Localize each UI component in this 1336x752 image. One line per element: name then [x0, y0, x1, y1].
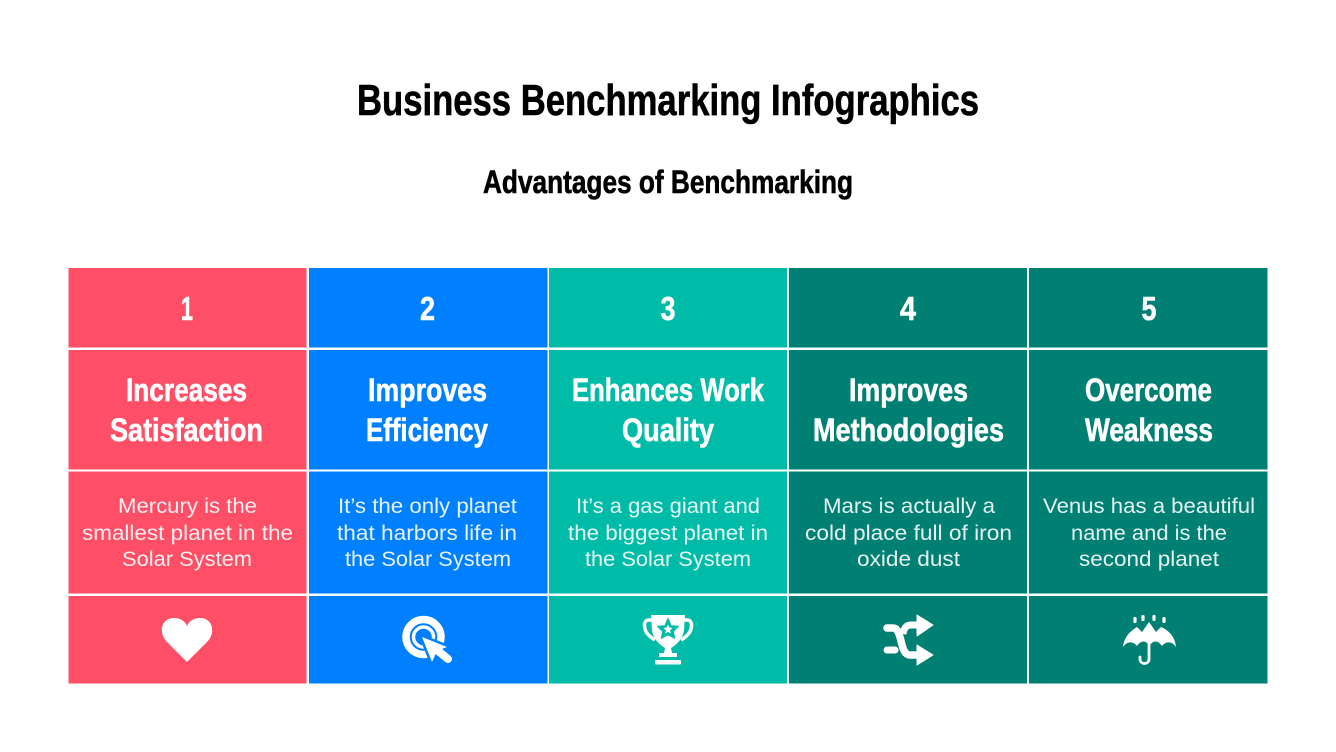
number cell 1: [68, 268, 306, 348]
title: Business Benchmarking Infographics: [357, 76, 979, 125]
description cell 3: It’s a gas giant and: [576, 495, 760, 518]
heading cell 3: Enhances Work: [572, 372, 764, 408]
number cell 3: 3: [660, 290, 676, 327]
heading cell 4: Improves: [849, 372, 968, 408]
description cell 4: [789, 472, 1027, 594]
heading cell 5: Overcome: [1085, 372, 1212, 408]
heading cell 5: Weakness: [1085, 412, 1213, 448]
description cell 4: oxide dust: [857, 548, 960, 571]
heading cell 1: [68, 350, 306, 470]
description cell 5: [1029, 472, 1268, 594]
number cell 3: [549, 268, 787, 348]
icon cell 4: shuffle arrows: [789, 596, 1027, 684]
icon cell 1: heart: [68, 596, 306, 684]
description cell 2: It’s the only planet: [338, 495, 517, 518]
heading cell 3: Quality: [622, 412, 714, 448]
heading cell 4: [789, 350, 1027, 470]
description cell 2: the Solar System: [345, 548, 511, 571]
description cell 1: [68, 472, 306, 594]
panel: column 5 overcome weakness: [1029, 268, 1268, 684]
heading cell 4: Methodologies: [813, 412, 1004, 448]
panel: column 3 enhances work quality: [549, 268, 787, 684]
heading cell 2: Efficiency: [366, 412, 488, 448]
number cell 5: 5: [1142, 290, 1156, 327]
number cell 2: 2: [420, 290, 435, 327]
description cell 4: cold place full of iron: [805, 522, 1012, 545]
description cell 5: second planet: [1079, 548, 1219, 571]
icon cell 2: target cursor: [309, 596, 548, 684]
description cell 3: the Solar System: [585, 548, 751, 571]
description cell 2: [309, 472, 548, 594]
description cell 4: Mars is actually a: [823, 495, 995, 518]
number cell 4: [789, 268, 1027, 348]
description cell 5: Venus has a beautiful: [1043, 495, 1255, 518]
description cell 1: Mercury is the: [118, 495, 257, 518]
description cell 1: smallest planet in the: [82, 522, 293, 545]
number cell 4: 4: [900, 290, 917, 327]
heading cell 1: Increases: [126, 372, 247, 408]
description cell 5: name and is the: [1071, 522, 1227, 545]
heading cell 2: Improves: [368, 372, 487, 408]
heading cell 5: [1029, 350, 1268, 470]
description cell 3: [549, 472, 787, 594]
panel: column 4 improves methodologies: [789, 268, 1027, 684]
heading cell 1: Satisfaction: [110, 412, 263, 448]
number cell 5: [1029, 268, 1268, 348]
subtitle: Advantages of Benchmarking: [483, 164, 853, 200]
description cell 1: Solar System: [122, 548, 252, 571]
description cell 3: the biggest planet in: [568, 522, 768, 545]
panel: column 2 improves efficiency: [309, 268, 548, 684]
number cell 1: 1: [181, 290, 193, 327]
panel: column 1 increases satisfaction: [68, 268, 306, 684]
icon cell 3: trophy: [549, 596, 787, 684]
heading cell 3: [549, 350, 787, 470]
heading cell 2: [309, 350, 548, 470]
icon cell 5: umbrella in rain: [1029, 596, 1268, 684]
number cell 2: [309, 268, 548, 348]
description cell 2: that harbors life in: [337, 522, 517, 545]
